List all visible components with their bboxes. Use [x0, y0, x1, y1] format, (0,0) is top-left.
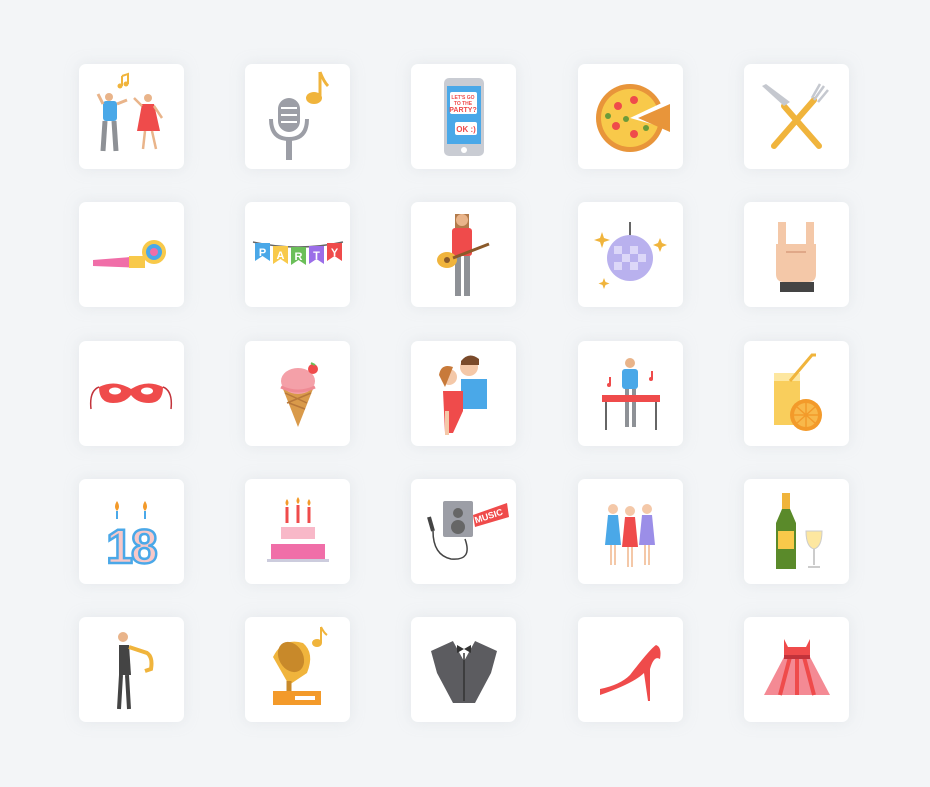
card: mask	[79, 341, 184, 446]
card: saxophone player	[79, 617, 184, 722]
card: phone party message: OK :)	[456, 125, 476, 134]
card: speaker music: MUSIC	[473, 507, 505, 525]
card: phone party message: PARTY?	[449, 107, 477, 114]
card: rock hand	[744, 202, 849, 307]
card: DJ	[578, 341, 683, 446]
card: guitar player	[411, 202, 516, 307]
card: 18 candles	[79, 479, 184, 584]
card: tuxedo	[411, 617, 516, 722]
card: party bunting	[245, 202, 350, 307]
card: party bunting: T	[313, 250, 320, 262]
card: pizza	[578, 64, 683, 169]
card: 18 candles: 18	[106, 521, 157, 574]
card: knife and fork	[744, 64, 849, 169]
card: dancing couple	[79, 64, 184, 169]
card: speaker music	[411, 479, 516, 584]
card: party horn	[79, 202, 184, 307]
card: birthday cake	[245, 479, 350, 584]
card: disco ball	[578, 202, 683, 307]
card: microphone	[245, 64, 350, 169]
card: dress	[744, 617, 849, 722]
card: high heel	[578, 617, 683, 722]
card: phone party message: LET'S GO	[451, 95, 475, 101]
card: party bunting: R	[295, 251, 303, 263]
card: ice cream	[245, 341, 350, 446]
card: champagne	[744, 479, 849, 584]
card: phone party message: TO THE	[454, 101, 473, 107]
card: kissing couple	[411, 341, 516, 446]
card: three women	[578, 479, 683, 584]
card: party bunting: A	[277, 250, 285, 262]
card: orange juice	[744, 341, 849, 446]
card: phone party message	[411, 64, 516, 169]
card: party bunting: Y	[331, 247, 339, 259]
card: gramophone	[245, 617, 350, 722]
card: party bunting: P	[259, 247, 266, 259]
